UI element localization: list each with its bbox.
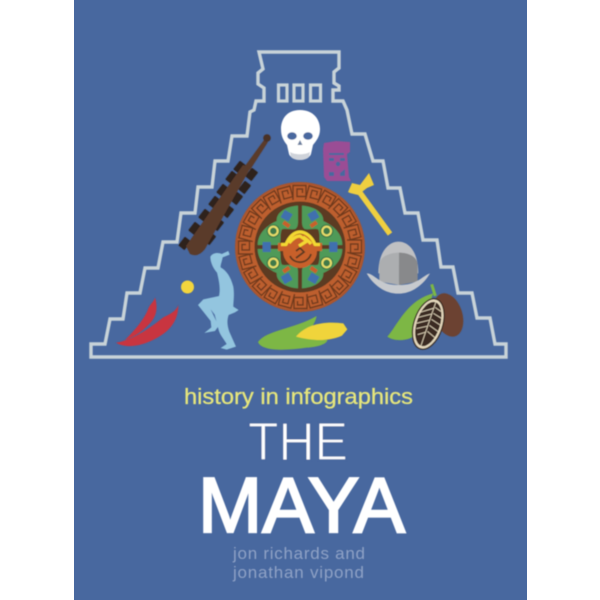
series title: history in infographics	[184, 384, 413, 409]
yellow arch	[281, 232, 320, 246]
icon: purple Maya glyph	[323, 141, 351, 181]
title: MAYA: MAYA	[198, 461, 405, 549]
authors	[232, 544, 365, 582]
icon: red chilli peppers	[116, 297, 178, 346]
temple windows	[278, 85, 320, 101]
icon: corn cob	[258, 316, 347, 350]
icon: conquistador helmet	[367, 242, 430, 294]
green and blue inner ring	[258, 206, 342, 288]
icon: skull	[281, 110, 320, 160]
medallion	[235, 182, 365, 312]
blue cover panel	[74, 0, 527, 600]
authors: jonathan vipond	[232, 563, 364, 582]
icon: yellow axe	[348, 173, 390, 234]
pyramid outline	[91, 52, 506, 357]
icon: ball player	[198, 251, 239, 350]
authors: jon richards and	[232, 544, 365, 563]
title: THE: THE	[248, 412, 348, 472]
icon: rubber ball	[181, 280, 194, 294]
central orange swirl	[283, 234, 317, 268]
cover artwork	[91, 52, 506, 582]
icon: spiked war club	[178, 134, 271, 255]
icon: cacao pod and leaf	[387, 284, 469, 353]
greek key ring	[238, 186, 362, 308]
